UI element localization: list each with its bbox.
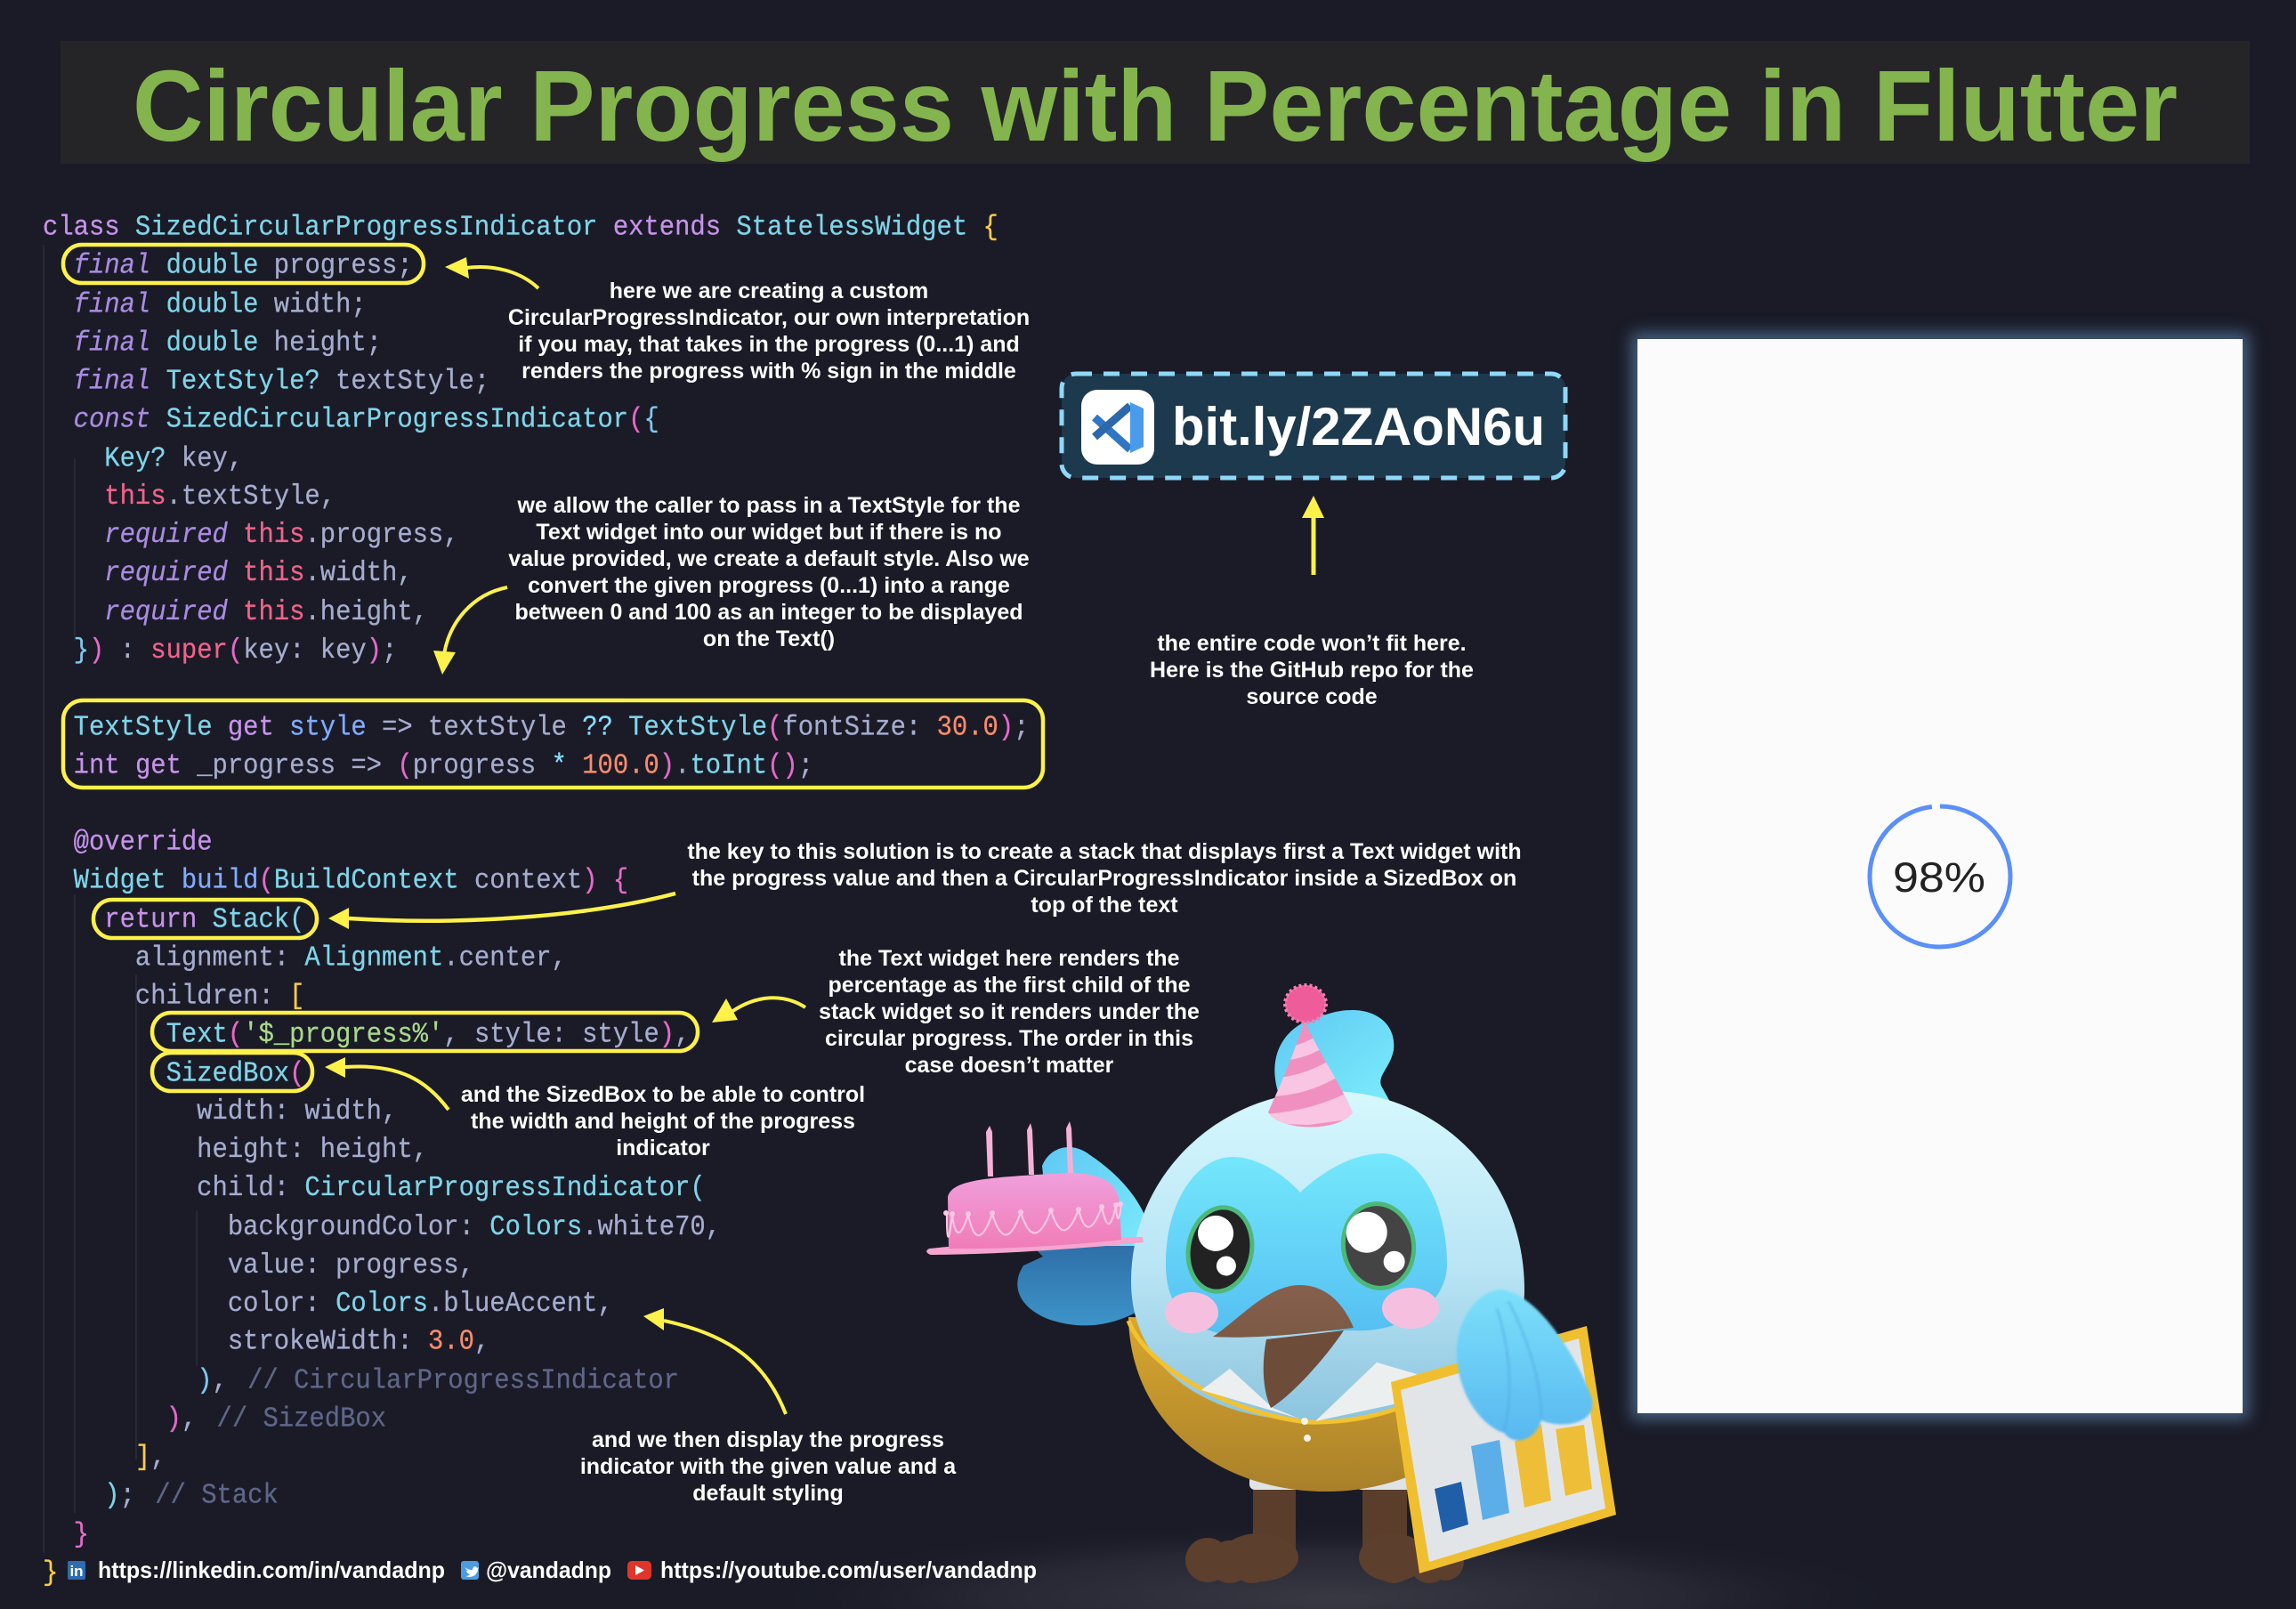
code: getters: TextStyle get style => textStyle ?? TextStyle(fontSize: 30.0); int get _progress => (progress * 100.0).toInt();	[74, 711, 1029, 781]
note: custom indicator	[508, 279, 1030, 384]
note: TextStyle explanation: we allow the caller to pass in a TextStyle for the	[517, 493, 1021, 518]
link box	[1062, 374, 1565, 478]
panel: app preview	[1637, 339, 2243, 1413]
note: stack: the progress value and then a CircularProgressIndicator inside a SizedBox on	[692, 866, 1516, 891]
note: Text widget: percentage as the first child of the	[828, 973, 1191, 998]
right wing	[1457, 1290, 1593, 1440]
floor glow	[756, 1522, 1913, 1609]
note: Text widget: circular progress. The order in this	[825, 1026, 1193, 1051]
note: repo: the entire code won’t fit here.	[1157, 631, 1467, 656]
note: custom indicator: here we are creating a custom	[610, 279, 928, 303]
feet	[1185, 1533, 1464, 1583]
chart board	[1391, 1326, 1616, 1573]
note: SizedBox: and the SizedBox to be able to control	[461, 1082, 865, 1107]
note: repo: source code	[1246, 684, 1378, 709]
code: build method: @override Widget build(BuildContext context) { return Stack( alignment: Alignment.center, children: [ Text('$_progress%', style: style), SizedBox( width: width, height: height, child: CircularProgressIndicator( backgroundColor: Colors.white70, value: progress, color: Colors.blueAccent, strokeWidth: 3.0, ), // CircularProgressIndicator ), // SizedBox ], ); // Stack } }	[43, 827, 721, 1589]
cake candles	[986, 1121, 1073, 1176]
note: TextStyle explanation: convert the given progress (0...1) into a range	[528, 573, 1010, 598]
arrow: to progress indicator	[643, 1308, 786, 1414]
note: TextStyle explanation: value provided, we create a default style. Also we	[508, 546, 1030, 571]
legs	[1253, 1477, 1407, 1553]
plate	[926, 1237, 1144, 1255]
bird mascot	[926, 985, 1616, 1583]
highlight: SizedBox	[152, 1053, 312, 1091]
note: TextStyle explanation: Text widget into our widget but if there is no	[536, 520, 1002, 545]
title: Circular Progress with Percentage in Flutter	[133, 50, 2178, 162]
arrow: to getters	[433, 587, 507, 675]
icon: YouTube	[627, 1561, 651, 1580]
face mask	[1166, 1153, 1447, 1333]
shirt edge	[1128, 1321, 1495, 1422]
circular progress	[1870, 806, 2010, 947]
left lower wing	[1017, 1246, 1148, 1325]
highlight: getters	[63, 700, 1043, 788]
note: repo: Here is the GitHub repo for the	[1150, 658, 1474, 683]
chart bars	[1435, 1424, 1592, 1532]
note: SizedBox: indicator	[616, 1136, 710, 1160]
hat pompom	[1285, 985, 1326, 1023]
YouTube URL: https://youtube.com/user/vandadnp	[660, 1556, 1037, 1583]
note: Text widget: the Text widget here renders the	[839, 946, 1180, 971]
icon: Twitter	[461, 1561, 479, 1580]
note: TextStyle explanation: on the Text()	[703, 627, 835, 651]
indent guides	[44, 245, 197, 1553]
LinkedIn URL: https://linkedin.com/in/vandadnp	[98, 1556, 445, 1583]
right eye	[1335, 1197, 1422, 1295]
note: TextStyle explanation: between 0 and 100 as an integer to be displayed	[514, 600, 1023, 625]
note: stack: top of the text	[1031, 893, 1178, 918]
shirt	[1128, 1317, 1525, 1492]
highlight: final double progress	[63, 245, 424, 283]
arrow: to Text	[712, 998, 805, 1023]
note: display	[580, 1427, 957, 1506]
note: Text widget: stack widget so it renders under the	[819, 999, 1200, 1024]
arrow: up to link box	[1302, 496, 1324, 575]
hat stripes	[1269, 1038, 1353, 1125]
left eye	[1179, 1200, 1261, 1299]
note: custom indicator: renders the progress with % sign in the middle	[521, 359, 1016, 384]
footer links	[68, 1556, 1037, 1583]
cake	[948, 1173, 1121, 1249]
note: custom indicator: CircularProgressIndicator, our own interpretation	[508, 305, 1030, 330]
chart face	[1401, 1338, 1605, 1562]
percentage label: 98%	[1893, 853, 1985, 901]
highlight: Text	[152, 1013, 698, 1051]
head	[1131, 1091, 1524, 1420]
Twitter handle: @vandadnp	[486, 1556, 611, 1583]
cuffs	[1249, 1476, 1411, 1490]
note: Text widget: case doesn’t matter	[905, 1053, 1114, 1078]
arrow: to final double progress	[445, 257, 538, 288]
highlight: return Stack	[93, 900, 317, 938]
icon: VS Code	[1081, 390, 1154, 465]
note: Text widget	[819, 946, 1200, 1078]
top wing	[1274, 1010, 1394, 1102]
code: class fields and constructor: class SizedCircularProgressIndicator extends StatelessWidget { final double progress; final double width; final double height; final TextStyle? textStyle; const SizedCircularProgressIndicator({ Key? key, this.textStyle, required this.progress, required this.width, required this.height, }) : super(key: key);	[43, 212, 998, 667]
note: SizedBox: the width and height of the progress	[471, 1109, 855, 1134]
upper beak	[1213, 1285, 1354, 1338]
icon: LinkedIn: in	[69, 1563, 84, 1580]
link text: bit.ly/2ZAoN6u	[1172, 397, 1545, 457]
title bar	[61, 41, 2250, 164]
hat	[1268, 1021, 1353, 1127]
collar	[1201, 1362, 1417, 1421]
arrow: to SizedBox	[325, 1057, 449, 1110]
note: stack: the key to this solution is to create a stack that displays first a Text widget with	[687, 839, 1522, 864]
note: stack	[687, 839, 1522, 918]
note: display: default styling	[692, 1481, 844, 1506]
note: display: and we then display the progress	[592, 1427, 944, 1452]
icon: LinkedIn	[68, 1561, 85, 1580]
buttons	[1301, 1418, 1311, 1442]
icing	[943, 1201, 1123, 1237]
note: display: indicator with the given value and a	[580, 1454, 957, 1479]
note: repo	[1150, 631, 1474, 709]
note: SizedBox	[461, 1082, 865, 1160]
note: TextStyle explanation	[508, 493, 1030, 651]
cheeks	[1165, 1288, 1439, 1333]
arrow: to return Stack	[328, 893, 675, 929]
left upper wing	[1042, 1147, 1148, 1264]
note: custom indicator: if you may, that takes in the progress (0...1) and	[518, 332, 1020, 357]
lower beak	[1264, 1330, 1344, 1408]
